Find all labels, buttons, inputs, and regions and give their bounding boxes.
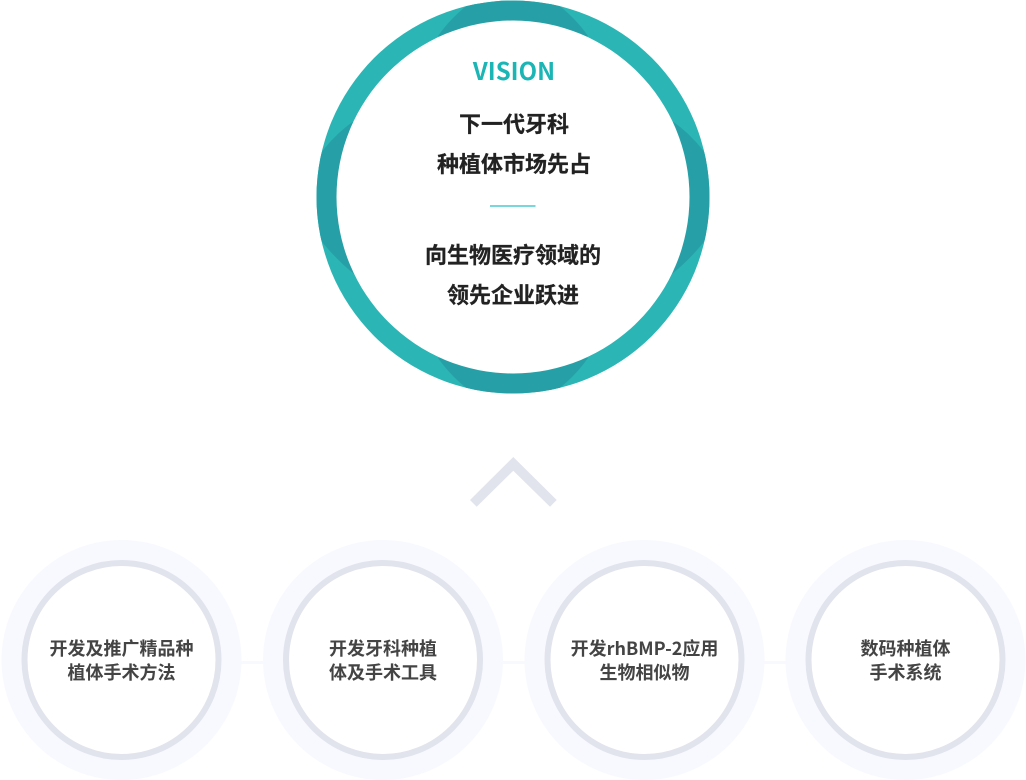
heading: VISION: VISION	[472, 52, 555, 87]
text: vision line two: 种植体市场先占	[437, 147, 591, 179]
darker ring overlaps	[316, 0, 710, 394]
divider	[490, 205, 536, 207]
text: vision line one: 下一代牙科	[459, 107, 569, 139]
inner white disc	[336, 20, 690, 374]
circle: premium implant methods	[2, 540, 242, 780]
circle: rhBMP-2 biosimilars	[524, 540, 764, 780]
circle: implants and surgical tools: 体及手术工具	[329, 659, 437, 685]
arrow: up chevron	[470, 457, 557, 507]
text: vision line four: 领先企业跃进	[447, 278, 579, 310]
vision circle	[316, 0, 710, 394]
circle: digital implant surgery system	[786, 540, 1026, 780]
circle: implants and surgical tools: 开发牙科种植	[329, 635, 437, 661]
circle: digital implant surgery system: 手术系统	[870, 659, 942, 685]
text: vision line three: 向生物医疗领域的	[425, 238, 601, 270]
circle: premium implant methods: 植体手术方法	[68, 659, 176, 685]
circle: implants and surgical tools	[263, 540, 503, 780]
circle: digital implant surgery system: 数码种植体	[860, 635, 950, 661]
circle: rhBMP-2 biosimilars: 开发rhBMP-2应用	[571, 635, 718, 661]
circle: rhBMP-2 biosimilars: 生物相似物	[600, 659, 690, 685]
teal ring	[316, 0, 710, 394]
circle: premium implant methods: 开发及推广精品种	[50, 635, 194, 661]
connectors between circles	[240, 661, 788, 664]
